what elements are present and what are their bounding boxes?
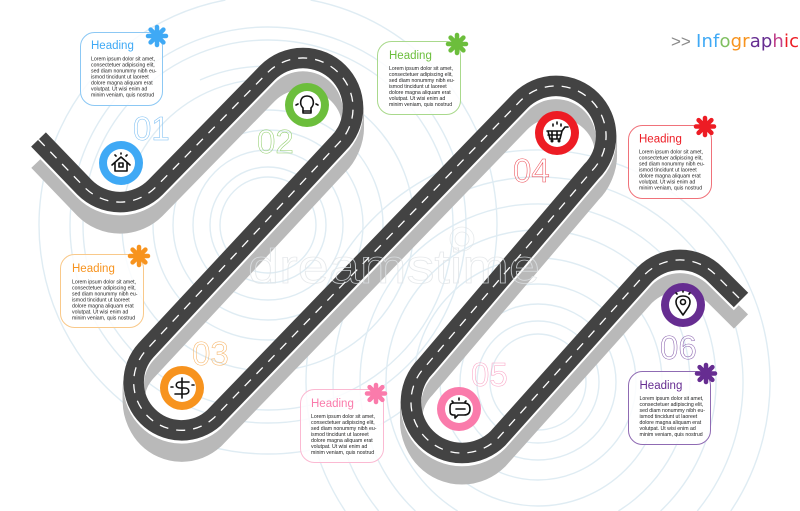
step 6 marker: location pin icon	[661, 283, 705, 327]
panel: heading 3: minim veniam, quis nostrud	[72, 316, 135, 322]
step 4 marker: shopping cart icon	[535, 111, 579, 155]
panel: heading 3: sed diam nonummy nibh eu-	[72, 292, 138, 298]
panel: heading 1: Lorem ipsum dolor sit amet,	[91, 56, 155, 62]
panel: heading 2: volutpat. Ut wisi enim ad	[389, 96, 445, 102]
panel: heading 4: consectetuer adipiscing elit,	[639, 156, 703, 162]
panel: heading 2: minim veniam, quis nostrud	[389, 102, 452, 108]
panel: heading 1	[80, 27, 166, 106]
panel: heading 5: consectetuer adipiscing elit,	[311, 420, 375, 426]
panel: heading 4: Lorem ipsum dolor sit amet,	[639, 150, 703, 156]
panel: heading 6	[628, 365, 715, 444]
number 05: 05	[471, 356, 508, 393]
panel: heading 6: dolore magna aliquam erat	[640, 420, 702, 426]
panel: heading 1: ismod tincidunt ut laoreet	[91, 74, 149, 80]
panel: heading 2: Heading	[389, 50, 432, 62]
panel: heading 3: consectetuer adipiscing elit,	[72, 286, 136, 292]
step 3 marker: dollar icon	[160, 366, 204, 410]
title: Infographic	[696, 31, 799, 52]
step 5 marker: chat icon	[437, 387, 481, 431]
panel: heading 1: volutpat. Ut wisi enim ad	[91, 86, 147, 92]
panel: heading 4: volutpat. Ut wisi enim ad	[639, 180, 695, 186]
panel: heading 6: minim veniam, quis nostrud	[640, 432, 703, 438]
panel: heading 4	[628, 118, 714, 198]
panel: heading 5: dolore magna aliquam erat	[311, 438, 373, 444]
number 04: 04	[513, 152, 550, 189]
panel: heading 4: ismod tincidunt ut laoreet	[639, 168, 697, 174]
panel: heading 1: sed diam nonummy nibh eu-	[91, 68, 157, 74]
panel: heading 4: Heading	[639, 134, 682, 146]
panel: heading 4: sed diam nonummy nibh eu-	[639, 162, 705, 168]
panel: heading 2: ismod tincidunt ut laoreet	[389, 84, 447, 90]
watermark	[248, 227, 540, 294]
panel: heading 6: Lorem ipsum dolor sit amet,	[640, 396, 704, 402]
panel: heading 6: volutpat. Ut wisi enim ad	[640, 426, 696, 432]
panel: heading 3: volutpat. Ut wisi enim ad	[72, 310, 128, 316]
panel: heading 1: minim veniam, quis nostrud	[91, 92, 154, 98]
panel: heading 6: consectetuer adipiscing elit,	[640, 402, 703, 408]
step 1 marker: home icon	[99, 141, 143, 185]
panel: heading 2: dolore magna aliquam erat	[389, 90, 451, 96]
panel: heading 1: consectetuer adipiscing elit,	[91, 62, 155, 68]
panel: heading 4: minim veniam, quis nostrud	[639, 186, 702, 192]
number 02: 02	[257, 123, 294, 160]
panel: heading 1: Heading	[91, 40, 134, 52]
panel: heading 5: minim veniam, quis nostrud	[311, 450, 374, 456]
panel: heading 6: ismod tincidunt ut laoreet	[640, 414, 698, 420]
panel: heading 3: Lorem ipsum dolor sit amet,	[72, 280, 136, 286]
number 01: 01	[133, 110, 170, 147]
panel: heading 5: sed diam nonummy nibh eu-	[311, 426, 377, 432]
panel: heading 3: ismod tincidunt ut laoreet	[72, 298, 130, 304]
title: >>	[671, 32, 691, 51]
watermark: dreamstime	[248, 241, 540, 294]
panel: heading 4: dolore magna aliquam erat	[639, 174, 701, 180]
panel: heading 6: sed diam nonummy nibh eu-	[640, 408, 705, 414]
panel: heading 5: Lorem ipsum dolor sit amet,	[311, 414, 375, 420]
panel: heading 2: sed diam nonummy nibh eu-	[389, 78, 455, 84]
step 2 marker: light bulb icon	[285, 83, 329, 127]
panel: heading 1: dolore magna aliquam erat	[91, 80, 153, 86]
panel: heading 3: Heading	[72, 263, 115, 275]
panel: heading 5	[300, 385, 385, 462]
panel: heading 5: volutpat. Ut wisi enim ad	[311, 444, 367, 450]
number 03: 03	[192, 335, 229, 372]
panel: heading 3	[60, 247, 148, 328]
panel: heading 2: consectetuer adipiscing elit,	[389, 72, 453, 78]
panel: heading 2: Lorem ipsum dolor sit amet,	[389, 66, 453, 72]
panel: heading 5: ismod tincidunt ut laoreet	[311, 432, 369, 438]
panel: heading 5: Heading	[311, 398, 354, 410]
panel: heading 3: dolore magna aliquam erat	[72, 304, 134, 310]
winding road with shadow	[38, 58, 741, 475]
panel: heading 2	[378, 35, 466, 114]
panel: heading 6: Heading	[640, 380, 682, 392]
number 06: 06	[660, 329, 697, 366]
